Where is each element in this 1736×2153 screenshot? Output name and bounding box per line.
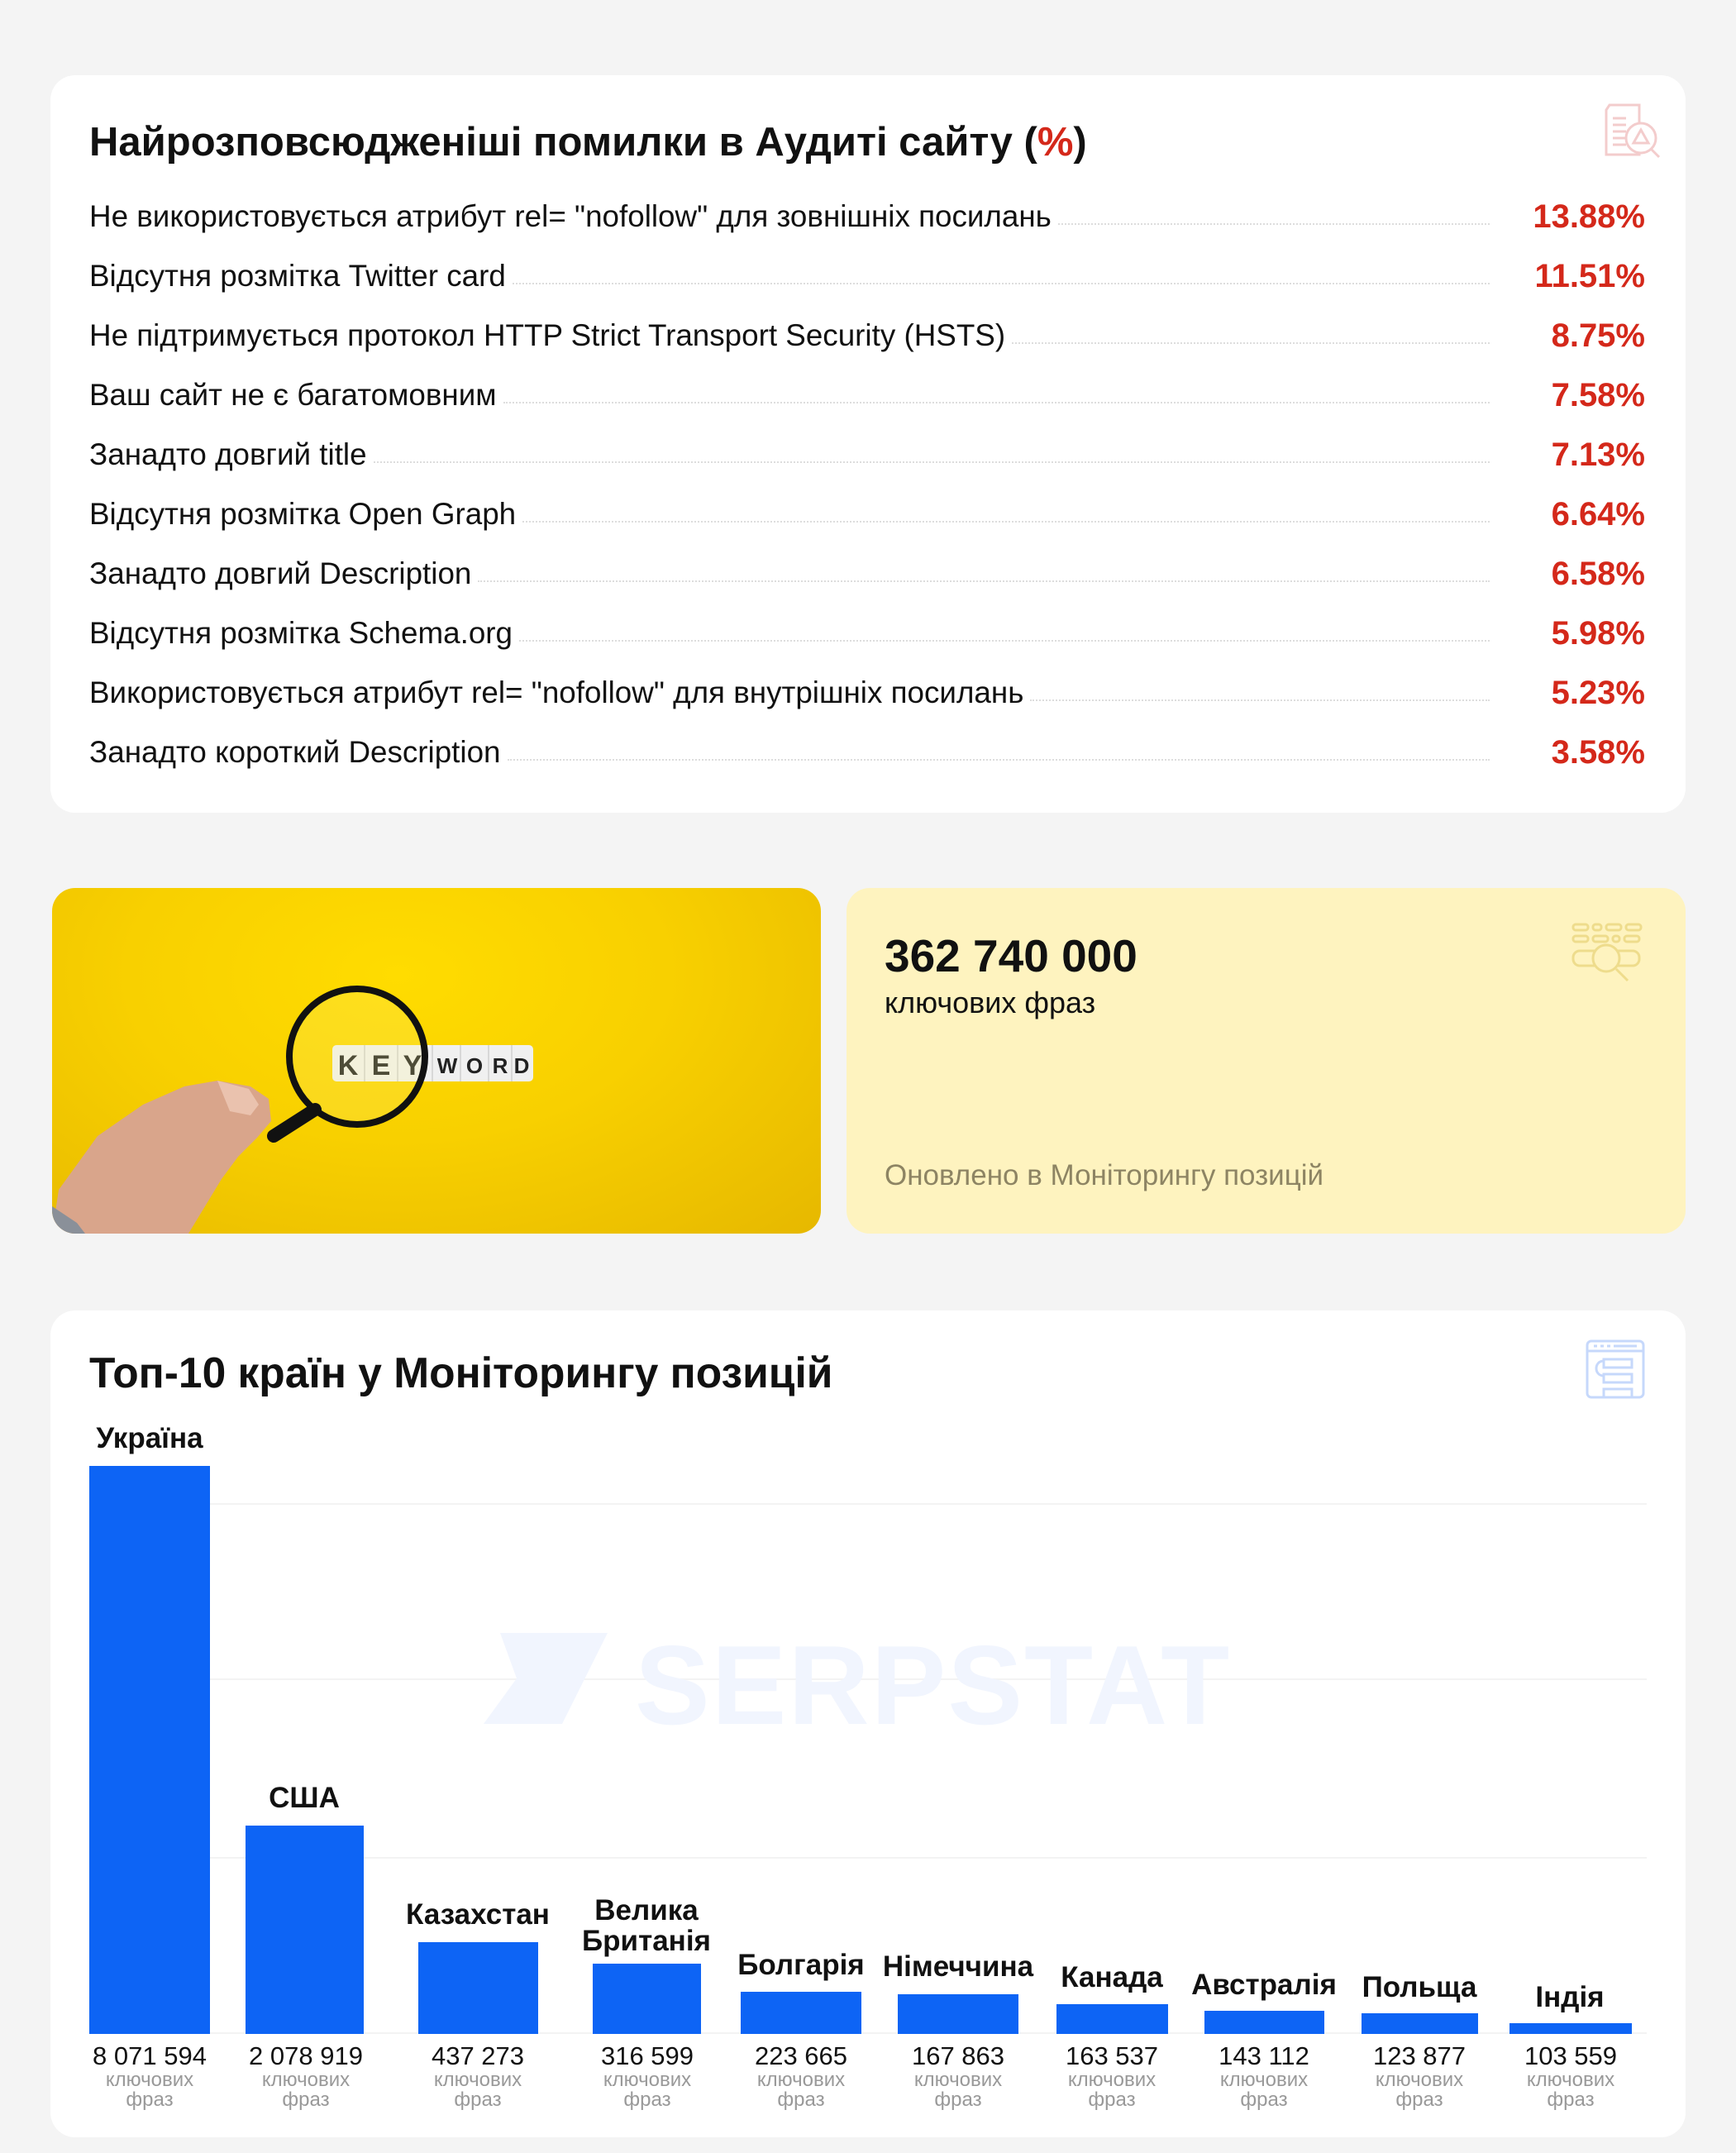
rows: audit error list: 13.88% <box>1533 198 1645 235</box>
rows: audit error list: Не використовується атрибут rel= "nofollow" для зовнішніх посилань <box>89 199 1052 233</box>
value labels: 167 863 <box>912 2041 1004 2070</box>
text: Австралія <box>1191 1969 1337 2001</box>
country labels: Болгарія <box>737 1949 865 1981</box>
photo: keyword magnifier: D <box>514 1053 529 1078</box>
value labels: 437 273 <box>432 2041 524 2070</box>
rows: audit error list: 6.58% <box>1552 556 1645 592</box>
value labels: 143 112 <box>1219 2041 1309 2070</box>
rows: audit error list: 5.23% <box>1552 675 1645 711</box>
photo: keyword magnifier: Y <box>403 1050 422 1081</box>
title: Найрозповсюдженіші помилки в Аудиті сайту (%) <box>89 120 1087 165</box>
icon: keyword search <box>1572 923 1642 981</box>
value labels: фраз <box>126 2089 174 2111</box>
country labels: Велика <box>594 1894 699 1926</box>
value labels: фраз <box>1547 2089 1595 2111</box>
rows: audit error list: Відсутня розмітка Open Graph <box>89 497 516 531</box>
value labels: 103 559 <box>1524 2041 1617 2070</box>
value labels: ключових <box>603 2069 691 2091</box>
country labels: Німеччина <box>883 1950 1033 1983</box>
photo: keyword magnifier: R <box>493 1053 508 1078</box>
value labels: фраз <box>1240 2089 1288 2111</box>
title: Топ-10 країн у Моніторингу позицій <box>89 1349 832 1396</box>
value labels: фраз <box>934 2089 982 2111</box>
value labels: 2 078 919 <box>249 2041 363 2070</box>
rows: audit error list: 7.13% <box>1552 437 1645 473</box>
value labels: ключових <box>757 2069 845 2091</box>
rows: audit error list: 11.51% <box>1535 258 1645 294</box>
value labels: 163 537 <box>1066 2041 1158 2070</box>
country labels: Казахстан <box>406 1898 550 1931</box>
big number: 362 740 000 <box>885 930 1137 981</box>
rows: audit error list: 8.75% <box>1552 317 1645 354</box>
icon: browser list <box>1586 1339 1645 1399</box>
value labels: фраз <box>623 2089 671 2111</box>
rows: audit error list <box>89 198 1645 771</box>
watermark text: SERPSTAT <box>635 1622 1231 1748</box>
value labels: ключових <box>434 2069 522 2091</box>
photo: keyword magnifier: E <box>372 1050 390 1081</box>
rows: audit error list: Занадто довгий Description <box>89 556 471 590</box>
value labels: фраз <box>454 2089 502 2111</box>
country labels <box>96 1422 1605 2013</box>
panel: top-10 countries chart <box>50 1310 1686 2137</box>
country labels: Канада <box>1061 1961 1163 1993</box>
watermark logo <box>484 1633 608 1724</box>
value labels: фраз <box>282 2089 330 2111</box>
rows: audit error list: 5.98% <box>1552 615 1645 652</box>
value labels: фраз <box>1088 2089 1136 2111</box>
value labels: 123 877 <box>1373 2041 1466 2070</box>
value labels: ключових <box>1527 2069 1614 2091</box>
value labels: ключових <box>914 2069 1002 2091</box>
value labels: ключових <box>262 2069 350 2091</box>
rows: audit error list: Не підтримується протокол HTTP Strict Transport Security (HSTS) <box>89 318 1005 352</box>
icon: document warning <box>1605 104 1660 158</box>
rows: audit error list: 7.58% <box>1552 377 1645 413</box>
bars <box>89 1466 1632 2034</box>
value labels: ключових <box>1220 2069 1308 2091</box>
country labels: США <box>269 1782 340 1814</box>
value labels: фраз <box>1395 2089 1443 2111</box>
value labels: фраз <box>777 2089 825 2111</box>
rows: audit error list: Занадто довгий title <box>89 437 367 471</box>
value labels: ключових <box>1376 2069 1463 2091</box>
rows: audit error list: 3.58% <box>1552 734 1645 771</box>
photo: keyword magnifier <box>52 888 821 1234</box>
value labels: 8 071 594 <box>93 2041 207 2070</box>
chart gridlines and watermark <box>210 1503 1647 1859</box>
country labels: Британія <box>582 1925 711 1957</box>
panel: keyword count <box>847 888 1686 1234</box>
rows: audit error list: Занадто короткий Description <box>89 735 501 769</box>
panel: audit errors <box>50 75 1686 813</box>
rows: audit error list: Ваш сайт не є багатомовним <box>89 378 497 412</box>
photo: keyword magnifier: O <box>466 1053 483 1078</box>
value labels: ключових <box>106 2069 193 2091</box>
text: Індія <box>1535 1981 1605 2013</box>
value labels <box>93 2041 1617 2111</box>
text: Польща <box>1362 1971 1476 2003</box>
value labels: ключових <box>1068 2069 1156 2091</box>
rows: audit error list: Відсутня розмітка Schema.org <box>89 616 513 650</box>
value labels: 223 665 <box>755 2041 847 2070</box>
rows: audit error list: Використовується атрибут rel= "nofollow" для внутрішніх посилань <box>89 675 1023 709</box>
rows: audit error list: Відсутня розмітка Twitter card <box>89 259 506 293</box>
photo: keyword magnifier: K <box>338 1050 359 1081</box>
country labels: Україна <box>96 1422 203 1454</box>
photo: keyword magnifier: W <box>437 1053 458 1078</box>
caption: ключових фраз <box>885 986 1095 1019</box>
footer note: Оновлено в Моніторингу позицій <box>885 1159 1323 1191</box>
value labels: 316 599 <box>601 2041 694 2070</box>
rows: audit error list: 6.64% <box>1552 496 1645 532</box>
